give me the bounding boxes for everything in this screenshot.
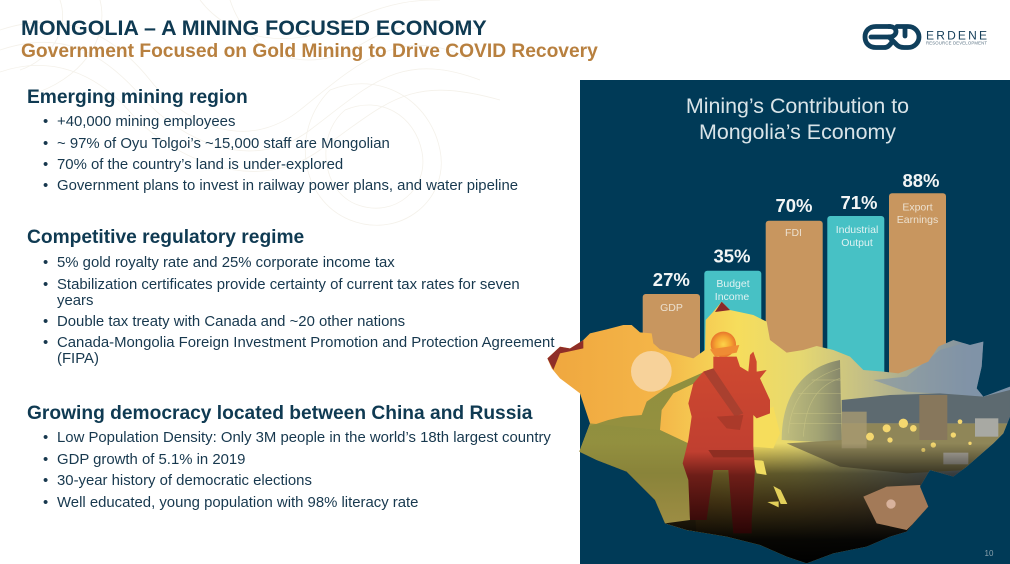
bar: budget income 35%: 35% [713,246,751,266]
dark foreground [580,445,989,564]
miner [683,352,770,533]
high-rise [919,395,947,440]
bar: export earnings 88%: Earnings [897,214,938,226]
bar: GDP 27%: GDP [660,302,683,314]
bar: GDP 27% [643,269,700,384]
subtitle: Government Focused on Gold Mining to Drive COVID Recovery [21,41,598,62]
text block: competitive regulatory regime: Stabilization certificates provide certainty of current tax rates for seven [57,277,520,293]
logo: Erdene Resource Development: ERDENE [926,28,987,42]
text block: competitive regulatory regime: Canada-Mongolia Foreign Investment Promotion and Protection Agreement [57,335,554,351]
map of Mongolia with miner and city [540,300,1010,564]
text block: competitive regulatory regime: Double tax treaty with Canada and ~20 other nations [57,314,405,330]
text block: emerging mining region: • [43,178,48,194]
curved tower [782,360,842,443]
bar: industrial output 71% [827,192,884,386]
text block: growing democracy: • [43,452,48,468]
text block: growing democracy: • [43,473,48,489]
text block: growing democracy: Low Population Density: Only 3M people in the world’s 18th largest country [57,430,551,446]
bar: FDI 70%: FDI [785,227,802,239]
text block: competitive regulatory regime [27,227,554,367]
text block: competitive regulatory regime: • [43,314,48,330]
text block: competitive regulatory regime: 5% gold royalty rate and 25% corporate income tax [57,255,395,271]
bright yellow glow around miner [753,407,780,448]
text block: emerging mining region [27,87,518,194]
text block: emerging mining region: • [43,114,48,130]
text block: competitive regulatory regime: • [43,277,48,293]
bar: export earnings 88%: 88% [902,170,940,191]
text block: competitive regulatory regime: years [57,293,93,309]
bar: FDI 70% [766,195,823,381]
glowing city [787,423,1010,473]
light gaps [767,486,787,507]
bar: GDP 27%: 27% [653,269,690,290]
panel background [580,80,1010,564]
bar: export earnings 88% [889,170,946,383]
panel title: Mining’s Contribution to [686,94,909,118]
text block: growing democracy: • [43,495,48,511]
sun [631,351,672,392]
bar: budget income 35% [704,246,761,381]
helmet [711,332,736,357]
logo: Erdene Resource Development [862,24,987,50]
heading: competitive regulatory regime: Competitive regulatory regime [27,227,304,248]
heading: emerging mining region: Emerging mining region [27,87,248,108]
bar: export earnings 88%: Export [902,202,933,214]
text block: competitive regulatory regime: (FIPA) [57,351,99,367]
sky haze [873,337,987,397]
text block: growing democracy: 30-year history of democratic elections [57,473,312,489]
title: MONGOLIA – A MINING FOCUSED ECONOMY [21,16,487,40]
text block: emerging mining region: • [43,136,48,152]
mountains [842,390,1010,423]
panel title [686,94,909,144]
text block: growing democracy [27,403,551,511]
bar: industrial output 71%: 71% [840,192,878,213]
ends of the map [547,340,583,370]
bar: budget income 35%: Budget [716,278,750,290]
text block: competitive regulatory regime: • [43,335,48,351]
text block: emerging mining region: • [43,157,48,173]
bar: budget income 35%: Income [715,291,749,303]
bar: industrial output 71%: Industrial [836,224,878,236]
excavator silhouette [573,369,712,533]
bar chart [643,170,946,386]
text block: emerging mining region: ~ 97% of Oyu Tolgoi’s ~15,000 staff are Mongolian [57,136,390,152]
panel title: Mongolia’s Economy [699,120,896,144]
text block: growing democracy: Well educated, young population with 98% literacy rate [57,495,418,511]
south-east rock patch [863,485,928,530]
text block: emerging mining region: 70% of the country’s land is under-explored [57,157,343,173]
heading: growing democracy: Growing democracy located between China and Russia [27,403,532,424]
logo: Erdene Resource Development: RESOURCE DEVELOPMENT [926,40,987,46]
bar: FDI 70%: 70% [775,195,813,216]
text block: emerging mining region: +40,000 mining employees [57,114,235,130]
text block: growing democracy: • [43,430,48,446]
bar: industrial output 71%: Output [841,237,873,249]
panel: mining's contribution [547,80,1010,564]
text block: emerging mining region: Government plans to invest in railway power plans, and water pipeline [57,178,518,194]
page number: 10 [985,549,994,558]
text block: growing democracy: GDP growth of 5.1% in 2019 [57,452,245,468]
text block: competitive regulatory regime: • [43,255,48,271]
